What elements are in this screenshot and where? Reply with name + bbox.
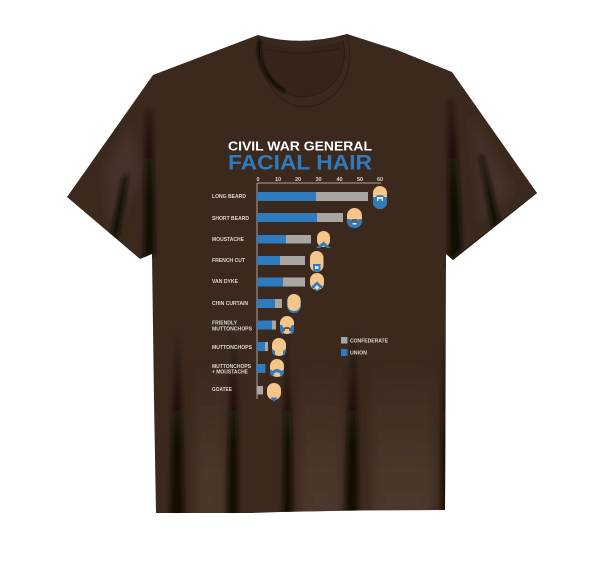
category labels: VAN DYKE (212, 279, 238, 285)
category labels: CHIN CURTAIN (212, 301, 248, 307)
axis: 20 (295, 177, 301, 183)
bar chart (212, 177, 387, 402)
axis: 10 (275, 177, 281, 183)
axis: 50 (357, 177, 363, 183)
collar (258, 35, 350, 107)
icon: chin curtain face (287, 294, 301, 313)
category labels: SHORT BEARD (212, 216, 249, 222)
icon: long beard face (373, 186, 387, 209)
category labels: + MOUSTACHE (212, 370, 248, 376)
axis: 60 (377, 177, 383, 183)
axis: 40 (336, 177, 343, 183)
icon: goatee face (267, 383, 281, 402)
icon: moustache face (316, 231, 331, 248)
axis: 0 (256, 177, 260, 183)
category labels: MOUSTACHE (212, 237, 244, 243)
category labels: FRIENDLY (212, 320, 237, 326)
axis (256, 177, 383, 399)
axis: 30 (315, 177, 322, 183)
legend: CONFEDERATE (350, 338, 388, 344)
category labels: MUTTONCHOPS (212, 326, 252, 332)
category labels: MUTTONCHOPS (212, 364, 251, 370)
bars (257, 192, 368, 394)
icon: muttonchops and moustache face (270, 359, 284, 377)
infographic t-shirt (67, 34, 537, 513)
icon: short beard face (347, 208, 362, 228)
category labels: GOATEE (212, 387, 232, 393)
t-shirt (60, 30, 545, 520)
title: CIVIL WAR GENERAL (228, 138, 372, 154)
category labels: MUTTONCHOPS (212, 345, 252, 351)
category labels: LONG BEARD (212, 194, 246, 200)
category labels (212, 194, 252, 393)
category labels: FRENCH CUT (212, 258, 246, 264)
icon: french cut face (310, 251, 324, 272)
icon: van dyke face (310, 273, 324, 292)
title (228, 138, 372, 174)
legend (341, 337, 388, 356)
title: FACIAL HAIR (228, 150, 372, 174)
legend: UNION (350, 350, 367, 356)
icon: muttonchops face (272, 338, 286, 356)
icon: friendly muttonchops face (280, 316, 294, 334)
